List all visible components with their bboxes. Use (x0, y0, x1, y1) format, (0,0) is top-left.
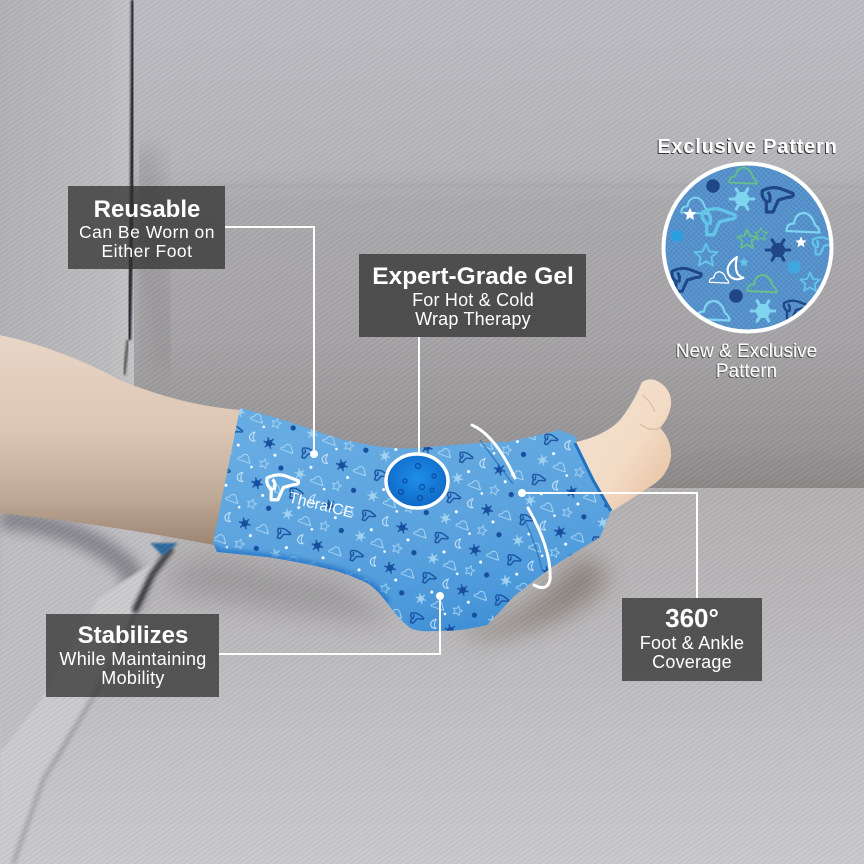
callout: 360 degree coverage (622, 598, 762, 681)
callout: 360 degree coverage: 360° (665, 603, 719, 633)
callout: Stabilizes (46, 614, 219, 697)
logo: TheraICE: TheraICE (287, 489, 355, 522)
gel window (386, 454, 448, 508)
360 degree arc arrows (472, 425, 550, 588)
sock wrap (213, 408, 611, 631)
callout: 360 degree coverage: Coverage (652, 652, 732, 672)
callout: Reusable (68, 186, 225, 269)
caption: New & Exclusive Pattern: New & Exclusive (676, 341, 817, 362)
foot with toes (572, 379, 671, 514)
caption: New & Exclusive Pattern: Pattern (716, 361, 777, 382)
callout: Reusable: Can Be Worn on (79, 222, 215, 242)
callout: Reusable: Either Foot (101, 241, 193, 261)
logo: TheraICE (267, 475, 355, 522)
leader line: 360 degree coverage (518, 489, 697, 598)
callout: Reusable: Reusable (94, 196, 200, 223)
leader line: Expert-Grade Gel (418, 337, 420, 453)
leg (0, 335, 240, 545)
heading: Exclusive Pattern: Exclusive Pattern (657, 136, 838, 158)
callout: Stabilizes: Stabilizes (78, 622, 188, 649)
heading: Exclusive Pattern: Exclusive Pattern (656, 137, 837, 159)
caption: New & Exclusive Pattern: Pattern (715, 362, 776, 383)
callout: 360 degree coverage: Foot & Ankle (640, 633, 744, 653)
callout: Stabilizes: Mobility (101, 668, 165, 688)
callout: Expert-Grade Gel: Wrap Therapy (415, 309, 531, 329)
callout: Expert-Grade Gel: For Hot & Cold (412, 290, 534, 310)
pattern swatch circle (664, 164, 834, 332)
caption: New & Exclusive Pattern (675, 341, 817, 383)
leader line: Stabilizes (219, 592, 444, 654)
caption: New & Exclusive Pattern: New & Exclusive (675, 342, 816, 363)
callout: Expert-Grade Gel (359, 254, 586, 337)
callout: Stabilizes: While Maintaining (59, 649, 207, 669)
callout: Expert-Grade Gel: Expert-Grade Gel (372, 263, 574, 290)
leader line: Reusable (225, 227, 318, 458)
